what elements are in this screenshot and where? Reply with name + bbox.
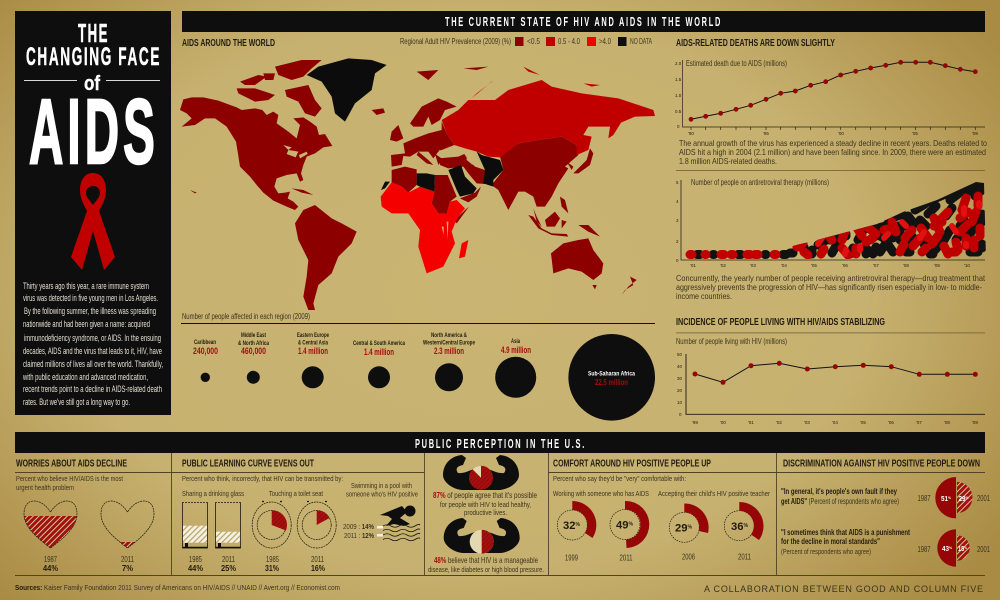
- pill chart: antiretroviral therapy: '03: [750, 263, 756, 268]
- icon: toilet seat 2011: 16%: [311, 563, 325, 573]
- quote: own fault: [781, 487, 899, 506]
- panel: comfort around hiv positive people: Working with someone who has AIDS: [553, 489, 649, 498]
- text block: intro: immunodeficiency syndrome, or AIDS. In the ensuing: [24, 333, 161, 343]
- pill chart: antiretroviral therapy: '06: [842, 263, 848, 268]
- line chart: people living with hiv: 0: [679, 412, 682, 417]
- region: eastern europe: [297, 332, 329, 388]
- line chart: people living with hiv: '01: [748, 420, 754, 425]
- legend: prevalence: [400, 37, 652, 46]
- icon: swimmer: 2009 : 14%: [343, 522, 374, 531]
- panel: people affected by region: Number of people affected in each region (2009): [182, 311, 310, 321]
- line chart: people living with hiv: '09: [972, 420, 978, 425]
- pill chart: antiretroviral therapy: '01: [690, 263, 696, 268]
- panel: public learning curve: PUBLIC LEARNING CURVE EVENS OUT: [182, 458, 314, 470]
- heading: aids around the world: AIDS AROUND THE WORLD: [182, 38, 275, 49]
- line chart: people living with hiv: '08: [944, 420, 950, 425]
- region: north america and europe: Western/Central Europe: [423, 340, 475, 346]
- region: asia: Asia: [511, 338, 520, 345]
- line chart: estimated deaths: '90: [688, 131, 694, 136]
- line chart: estimated deaths: 1.0: [675, 93, 682, 98]
- line chart: people living with hiv: [676, 337, 985, 425]
- line chart: people living with hiv: 20: [677, 388, 683, 393]
- icon: heart 2011: [101, 501, 154, 573]
- heading: public perception bar: [15, 432, 985, 453]
- title: CHANGING FACE: [26, 43, 161, 71]
- line chart: people living with hiv: Number of people living with HIV (millions): [676, 337, 787, 346]
- donut: 2006 29 percent: [669, 503, 709, 562]
- region: middle east: [238, 332, 269, 384]
- title: AIDS: [29, 81, 159, 183]
- line chart: people living with hiv: '00: [720, 420, 726, 425]
- quote: punishment: "I sometimes think that AIDS is a punishment: [781, 528, 910, 537]
- title: [24, 18, 161, 183]
- region: middle east: 460,000: [241, 346, 266, 356]
- panel: public learning curve: Sharing a drinking glass: [182, 489, 244, 498]
- panel: comfort around hiv positive people: [553, 458, 770, 562]
- heading: public perception bar: PUBLIC PERCEPTION IN THE U.S.: [415, 436, 586, 451]
- pill chart: antiretroviral therapy: 5: [676, 180, 679, 185]
- half circles: own fault: 51: [941, 494, 949, 503]
- donut: 2011 36 percent: %: [743, 523, 749, 529]
- region: eastern europe: Eastern Europe: [297, 332, 329, 339]
- text: 48 percent: [428, 555, 544, 574]
- pill chart: antiretroviral therapy: Number of people on antiretroviral therapy (millions): [691, 178, 829, 187]
- line chart: estimated deaths: '95: [763, 131, 769, 136]
- line chart: estimated deaths: 0.5: [675, 109, 682, 114]
- half circles: own fault: %: [966, 495, 969, 500]
- quote: punishment: [781, 528, 910, 556]
- half circles: punishment: 43: [942, 544, 950, 553]
- icon: glass 2011: [215, 502, 241, 573]
- region: north america and europe: [423, 332, 475, 391]
- text block: intro: with public education and advanced medication,: [22, 372, 148, 382]
- line chart: estimated deaths: 2.0: [675, 61, 682, 66]
- pill chart: antiretroviral therapy: [676, 178, 985, 268]
- panel: public learning curve: someone who's HIV positive: [346, 490, 418, 498]
- legend: prevalence: >4.0: [599, 37, 611, 46]
- donut: 1999 32 percent: %: [575, 522, 581, 528]
- text: 48 percent: disease, like diabetes or high blood pressure.: [428, 565, 544, 574]
- pill chart: antiretroviral therapy: '02: [720, 263, 726, 268]
- text: 87 percent: 87% of people agree that it's possible: [433, 490, 537, 500]
- heading: deaths: AIDS-RELATED DEATHS ARE DOWN SLIGHTLY: [676, 38, 835, 49]
- legend: prevalence: 0.5 - 4.0: [558, 37, 580, 46]
- legend: prevalence: NO DATA: [630, 37, 652, 46]
- pill chart: antiretroviral therapy: 3: [676, 218, 679, 223]
- pill chart: antiretroviral therapy: 0: [676, 258, 679, 263]
- region: caribbean: 240,000: [193, 346, 218, 356]
- heading: world section bar: [182, 11, 985, 32]
- donut: 2011 49 percent: %: [628, 522, 634, 528]
- icon: toilet seat 1985: 31%: [265, 563, 279, 573]
- line chart: people living with hiv: 40: [677, 364, 683, 369]
- panel: comfort around hiv positive people: Accepting their child's HIV positive teacher: [658, 489, 770, 498]
- panel: healthy lives: [428, 455, 544, 574]
- line chart: people living with hiv: '02: [776, 420, 782, 425]
- line chart: people living with hiv: '04: [832, 420, 838, 425]
- text block: intro: recent trends point to a decline in AIDS-related death: [23, 384, 162, 394]
- pill chart: antiretroviral therapy: '04: [781, 263, 787, 268]
- map lakes and inland seas: [283, 145, 473, 165]
- text block: intro: claimed millions of lives all over the world. Thankfully,: [23, 359, 163, 369]
- line chart: people living with hiv: '06: [888, 420, 894, 425]
- region: asia: 4.9 million: [501, 345, 531, 355]
- donut: 2011 49 percent: 2011: [620, 554, 633, 562]
- panel: worries about aids: WORRIES ABOUT AIDS DECLINE: [16, 458, 127, 470]
- region: north america and europe: North America &: [431, 332, 467, 339]
- donut: 1999 32 percent: [557, 501, 596, 562]
- text block: therapy paragraph: income countries.: [676, 291, 732, 301]
- donut: 2011 36 percent: 2011: [738, 552, 751, 562]
- text: 87 percent: for people with HIV to lead healthy,: [440, 500, 531, 509]
- pill chart: antiretroviral therapy: '09: [934, 263, 940, 268]
- half circles: own fault: 1987: [918, 494, 931, 503]
- icon: glass 2011: 25%: [221, 563, 236, 573]
- text block: therapy paragraph: [676, 273, 986, 301]
- donut: 1999 32 percent: 32: [563, 520, 575, 532]
- half circles: punishment: 1987: [918, 545, 931, 554]
- donut: 2011 36 percent: 36: [731, 521, 743, 533]
- icon: glass 1985: 1985: [189, 555, 202, 564]
- icon: toilet seat 2011: [297, 502, 336, 573]
- region: caribbean: Caribbean: [194, 339, 216, 346]
- icon: toilet seat 1985: 1985: [266, 555, 279, 564]
- panel: discrimination: [781, 458, 990, 567]
- line chart: people living with hiv: '99: [692, 420, 698, 425]
- line chart: people living with hiv: 10: [677, 400, 683, 405]
- text block: intro: Thirty years ago this year, a rare immune system: [23, 281, 149, 291]
- text block: deaths paragraph: 1.8 million AIDS-related deaths.: [679, 156, 777, 166]
- text: 87 percent: productive lives.: [464, 508, 507, 517]
- region: asia: [495, 338, 536, 398]
- donut: 2006 29 percent: %: [687, 524, 693, 530]
- icon: heart 2011: 2011: [121, 555, 134, 564]
- quote: punishment: for the decline in moral standards": [781, 537, 880, 546]
- icon: toilet seat 2011: 2011: [311, 555, 324, 564]
- line chart: people living with hiv: '03: [804, 420, 810, 425]
- panel: public learning curve: Touching a toilet seat: [269, 489, 324, 498]
- region: middle east: Middle East: [241, 332, 267, 339]
- text: 87 percent: [433, 490, 537, 517]
- icon: heart 1987: 1987: [44, 555, 57, 564]
- pill chart: antiretroviral therapy: '05: [811, 263, 817, 268]
- text block: intro: rates. But we've still got a long way to go.: [23, 397, 130, 407]
- line chart: estimated deaths: '09: [972, 131, 978, 136]
- half circles: punishment: %: [964, 545, 967, 550]
- region: sub-saharan africa: [568, 334, 655, 421]
- half circles: own fault: [918, 477, 990, 518]
- pill chart: antiretroviral therapy: 2: [676, 239, 679, 244]
- region: eastern europe: 1.4 million: [298, 346, 328, 356]
- icon: glass 1985: 44%: [188, 563, 203, 573]
- panel: people affected by region: [181, 311, 655, 421]
- icon: flexed arms 48 percent: [444, 518, 520, 554]
- footer: sources: Sources: Kaiser Family Foundation 2011 Survey of Americans on HIV/AIDS // UNAID // Avert.org // Economist.com: [15, 583, 340, 592]
- legend: prevalence: <0.5: [527, 37, 540, 46]
- quote: own fault: get AIDS" (Percent of respondents who agree): [781, 497, 899, 506]
- line chart: estimated deaths: 0: [677, 124, 680, 129]
- region: north america and europe: 2.3 million: [434, 346, 464, 356]
- line chart: people living with hiv: '05: [860, 420, 866, 425]
- region: sub-saharan africa: 22.5 million: [595, 377, 628, 387]
- pill chart: antiretroviral therapy: '07: [873, 263, 879, 268]
- heading: incidence: INCIDENCE OF PEOPLE LIVING WITH HIV/AIDS STABILIZING: [676, 317, 885, 328]
- heading: world section bar: THE CURRENT STATE OF HIV AND AIDS IN THE WORLD: [445, 14, 722, 29]
- text block: intro: virus was detected in five young men in Los Angeles.: [23, 293, 158, 303]
- title: THE: [78, 18, 109, 48]
- donut: 2011 36 percent: [724, 502, 764, 562]
- dark red regions: [180, 60, 637, 310]
- donut: 2006 29 percent: 29: [675, 522, 687, 534]
- line chart: estimated deaths: '00: [838, 131, 844, 136]
- panel: public learning curve: [182, 458, 420, 573]
- panel: worries about aids: [16, 458, 154, 573]
- line chart: estimated deaths: [675, 59, 985, 136]
- region: caribbean: [193, 339, 218, 382]
- line chart: people living with hiv: 30: [677, 376, 683, 381]
- panel: worries about aids: Percent who believe HIV/AIDS is the most: [16, 474, 124, 483]
- pill chart: antiretroviral therapy: '10: [964, 263, 970, 268]
- icon: glass 1985: [182, 502, 208, 573]
- half circles: own fault: 2001: [977, 494, 990, 503]
- half circles: punishment: 15: [958, 544, 966, 553]
- pill chart: antiretroviral therapy: '08: [903, 263, 909, 268]
- title: of: [84, 73, 100, 95]
- panel: comfort around hiv positive people: Percent who say they'd be "very" comfortable with:: [553, 474, 686, 483]
- half circles: punishment: [918, 529, 990, 567]
- footer: collaboration credit: A COLLABORATION BETWEEN GOOD AND COLUMN FIVE: [704, 584, 983, 594]
- panel: public learning curve: Swimming in a pool with: [351, 481, 412, 490]
- pill chart: antiretroviral therapy: 4: [676, 199, 679, 204]
- icon: swimmer: [343, 506, 420, 541]
- half circles: own fault: 29: [958, 494, 967, 503]
- quote: own fault: "In general, it's people's own fault if they: [781, 487, 897, 496]
- line chart: estimated deaths: 1.5: [675, 77, 682, 82]
- legend: prevalence: Regional Adult HIV Prevalence (2009) (%): [400, 37, 511, 46]
- no data regions: [307, 58, 503, 197]
- region: central and south america: [353, 340, 405, 388]
- icon: heart 1987: [24, 501, 77, 573]
- capsules: [690, 184, 984, 255]
- half circles: punishment: 2001: [977, 545, 990, 554]
- line chart: estimated deaths: Estimated death due to AIDS (millions): [686, 59, 787, 68]
- region: eastern europe: & Central Asia: [298, 340, 328, 346]
- text: 48 percent: 48% believe that HIV is a manageable: [434, 555, 538, 565]
- donut: 2006 29 percent: 2006: [682, 552, 695, 562]
- world map: [180, 58, 655, 310]
- text block: intro: decades, AIDS and the virus that leads to it, HIV, have: [23, 346, 162, 356]
- text block: intro: [22, 281, 163, 407]
- donut: 2011 49 percent: 49: [616, 520, 628, 532]
- sub-saharan africa: [381, 182, 468, 273]
- icon: glass 2011: 2011: [222, 555, 235, 564]
- text block: deaths paragraph: [679, 138, 987, 166]
- half circles: punishment: %: [949, 545, 952, 550]
- quote: punishment: (Percent of respondents who agree): [781, 547, 871, 556]
- text block: intro: nationwide and had been given a name: acquired: [23, 319, 150, 329]
- russia and central asia: [442, 67, 655, 157]
- half circles: own fault: %: [948, 495, 951, 500]
- donut: 1999 32 percent: 1999: [565, 554, 578, 562]
- panel: public learning curve: Percent who think, incorrectly, that HIV can be transmitted by:: [182, 474, 343, 483]
- line chart: estimated deaths: '05: [912, 131, 918, 136]
- icon: flexed arms 87 percent: [443, 455, 519, 490]
- donut: 2011 49 percent: [610, 501, 649, 562]
- icon: heart 1987: 44%: [43, 563, 58, 573]
- panel: worries about aids: urgent health problem: [16, 483, 74, 492]
- icon: toilet seat 1985: [252, 502, 291, 573]
- icon: heart 2011: 7%: [122, 563, 133, 573]
- line chart: people living with hiv: '07: [916, 420, 922, 425]
- panel: comfort around hiv positive people: COMFORT AROUND HIV POSITIVE PEOPLE UP: [553, 458, 711, 470]
- icon: red ribbon: [71, 173, 115, 270]
- panel: title sidebar: [15, 11, 171, 415]
- line chart: people living with hiv: 50: [677, 352, 683, 357]
- region: central and south america: 1.4 million: [364, 347, 394, 357]
- text block: intro: By the following summer, the illness was spreading: [24, 306, 156, 316]
- icon: swimmer: 2011 : 12%: [344, 531, 374, 540]
- region: middle east: & North Africa: [238, 340, 269, 347]
- region: central and south america: Central & South America: [353, 340, 405, 347]
- region: sub-saharan africa: Sub-Saharan Africa: [588, 370, 635, 378]
